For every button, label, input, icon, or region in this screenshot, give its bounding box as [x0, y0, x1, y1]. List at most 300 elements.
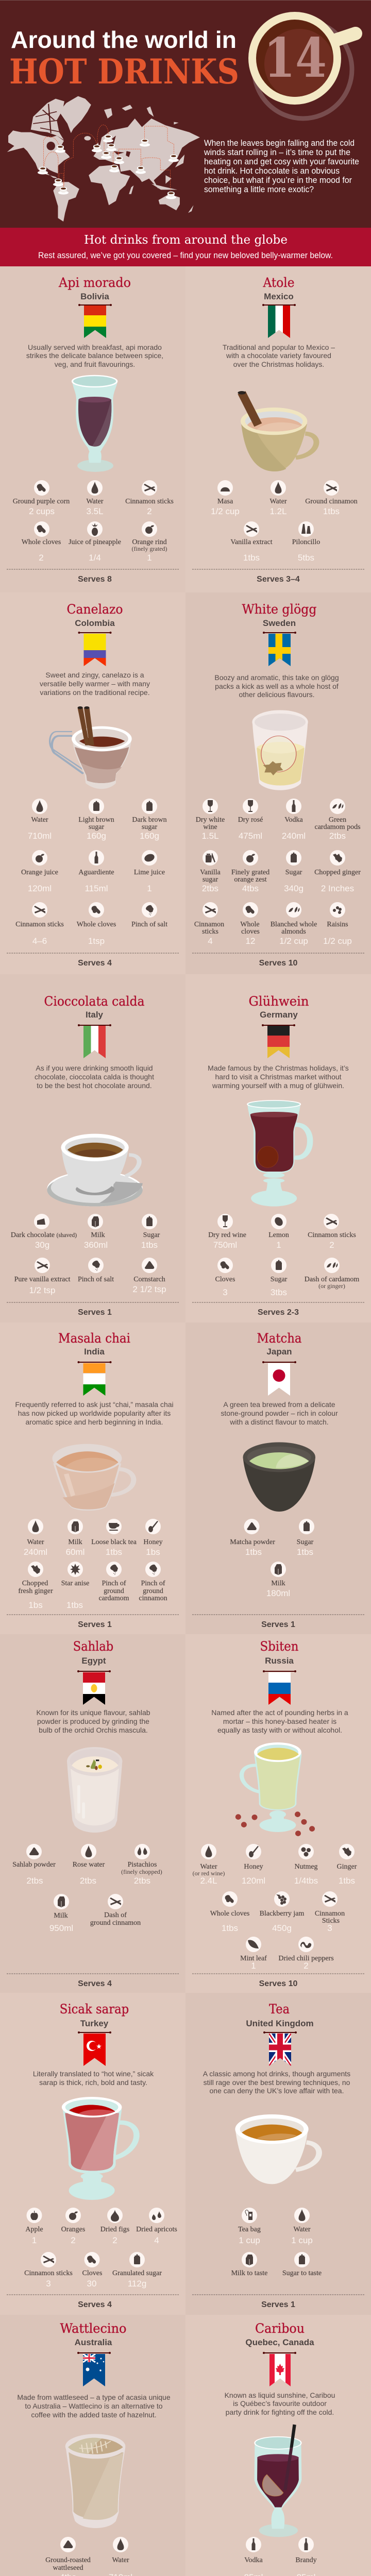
description: Known as liquid sunshine, Caribou: [225, 2391, 335, 2399]
ingredient: chopped fresh ginger: [18, 1562, 53, 1610]
serves: Serves 1: [78, 1620, 112, 1629]
ingredient: apple: 1: [32, 2235, 37, 2245]
ingredient: raisins: 1/2 cup: [323, 936, 352, 946]
ingredient: cinnamon sticks: [194, 902, 224, 946]
ingredient: star anise: 1tbs: [66, 1600, 83, 1610]
ingredient: sugar: 340g: [284, 884, 303, 893]
ingredient: tea bag: [238, 2208, 261, 2245]
ingredient: vanilla extract: Vanilla extract: [230, 538, 273, 546]
description: Made famous by the Christmas holidays, it’s: [208, 1064, 349, 1072]
ingredient: whole cloves: Whole: [240, 921, 260, 928]
country: Russia: [265, 1656, 294, 1666]
ingredient: dark chocolate: 30g: [35, 1240, 49, 1250]
ingredient: vanilla sugar: 2tbs: [202, 884, 218, 893]
ingredient: blanched whole almonds: almonds: [281, 928, 306, 936]
ingredient: whole cloves: [210, 1891, 249, 1933]
ingredient: cornstarch: 2 1/2 tsp: [132, 1284, 166, 1294]
description: A classic among hot drinks, though arguments: [203, 2070, 350, 2078]
description: party drink for fighting off the cold.: [226, 2408, 334, 2416]
icon: coffee cup with number 14: [248, 12, 356, 118]
description: over the Christmas holidays.: [233, 360, 324, 368]
ingredient: pistachios: [121, 1844, 162, 1886]
ingredient: cinnamon sticks: [125, 480, 174, 516]
ingredient: milk: 60ml: [66, 1547, 85, 1557]
ingredient: green cardamom pods: [314, 799, 361, 841]
ingredient: brandy: [295, 2537, 317, 2576]
ingredient: blackberry jam: Blackberry jam: [260, 1910, 304, 1918]
ingredient: ground cinnamon: cinnamon: [139, 1595, 167, 1602]
country: India: [84, 1347, 105, 1357]
country: Colombia: [75, 618, 115, 628]
heading: Wattlecino: [60, 2321, 127, 2336]
ingredient: dried apricots: [136, 2208, 177, 2245]
ingredient: blanched whole almonds: [271, 902, 317, 946]
ingredient: water: Water: [293, 2226, 311, 2233]
illustration: matcha bowl: [243, 1442, 315, 1512]
ingredient: pistachios: Pistachios: [128, 1861, 157, 1869]
flag: Egypt: [77, 1670, 111, 1705]
ingredient: mint leaf: 1: [251, 1961, 256, 1971]
ingredient: whole cloves: 2: [39, 553, 44, 563]
ingredient: pure vanilla extract: 1/2 tsp: [29, 1285, 56, 1295]
ingredient: dry red wine: Dry red wine: [208, 1231, 246, 1239]
heading: Matcha: [257, 1331, 302, 1346]
panel: Matcha: [185, 1323, 371, 1634]
ingredient: orange juice: 120ml: [28, 884, 52, 893]
ingredient: dash of cardamom: Dash of cardamom: [305, 1276, 359, 1283]
ingredient: ground cardamom: cardamom: [98, 1595, 129, 1602]
ingredient: orange rind: (finely grated): [132, 545, 167, 552]
illustration: api morado glass: [72, 376, 117, 472]
heading: Masala chai: [58, 1331, 130, 1346]
ingredient: blanched whole almonds: Blanched whole: [271, 921, 317, 928]
ingredient: lime juice: [134, 850, 165, 893]
ingredient: mint leaf: Mint leaf: [240, 1955, 267, 1962]
description: [203, 2070, 350, 2095]
ingredient: honey: [143, 1519, 163, 1557]
intro text: [204, 139, 359, 194]
ingredient: light brown sugar: sugar: [89, 823, 104, 831]
ingredient: whole cloves: [77, 902, 116, 946]
ingredient: juice of pineapple: Juice of pineapple: [69, 538, 121, 546]
ingredient: milk: 360ml: [84, 1240, 108, 1250]
ingredient: pinch of salt: Pinch of salt: [131, 921, 167, 928]
ingredient: ground-roasted wattleseed: wattleseed: [53, 2564, 83, 2572]
ingredient: chopped ginger: Chopped ginger: [314, 869, 361, 876]
ingredient: dry rosé: Dry rosé: [238, 816, 263, 824]
ingredient: cinnamon sticks: Cinnamon sticks: [24, 2269, 73, 2277]
section subheading: Rest assured, we’ve got you covered – find your new beloved belly-warmer below.: [38, 251, 333, 260]
illustration: sbiten glass with berries: [235, 1742, 315, 1836]
ingredient: star anise: Star anise: [61, 1580, 89, 1587]
ingredient: rose water: 2tbs: [80, 1876, 96, 1886]
ingredient: masa: Masa: [217, 498, 233, 505]
ingredient: vanilla sugar: Vanilla: [200, 869, 221, 876]
ingredient: cinnamon sticks: Cinnamon sticks: [15, 921, 64, 928]
ingredient: raisins: [323, 902, 352, 946]
ingredient: honey: Honey: [143, 1538, 163, 1546]
heading: Glühwein: [248, 994, 309, 1009]
ingredient: sahlab powder: 2tbs: [26, 1876, 43, 1886]
illustration: white glögg glass: [252, 710, 308, 790]
ingredient: matcha powder: Matcha powder: [230, 1538, 275, 1546]
ingredient: lime juice: Lime juice: [134, 869, 165, 876]
panel: Cioccolata calda: [0, 974, 185, 1323]
ingredient: cloves: Cloves: [215, 1276, 235, 1283]
ingredient: dry white wine: [196, 799, 225, 841]
ingredient: dried figs: Dried figs: [100, 2226, 129, 2233]
intro text: winds start rolling in – it’s time to put the: [204, 148, 350, 157]
ingredient: milk: Milk: [54, 1912, 68, 1920]
heading: Sicak sarap: [60, 2002, 129, 2016]
ingredient: orange zest: 4tbs: [242, 884, 259, 893]
serves: Serves 1: [261, 2300, 295, 2309]
ingredient: milk: [49, 1894, 73, 1933]
panel: Wattlecino: [0, 2315, 185, 2576]
ingredient: chopped fresh ginger: Chopped: [22, 1580, 48, 1587]
description: [40, 671, 150, 697]
panel: White glögg: [185, 592, 371, 974]
ingredient: milk: 180ml: [266, 1588, 290, 1598]
description: equally as tasty with or without alcohol.: [217, 1726, 342, 1734]
world map with drink locations: [7, 96, 200, 222]
ingredient: dried apricots: 4: [154, 2235, 159, 2245]
ingredient: sugar: 1tbs: [297, 1547, 313, 1557]
ingredient: dark brown sugar: sugar: [142, 823, 157, 831]
icon: coffee cup with number 14: 14: [264, 26, 327, 90]
ingredient: aguardiente: [78, 850, 114, 893]
ingredient: masa: 1/2 cup: [211, 506, 240, 516]
ingredient: ground-roasted wattleseed: [45, 2537, 91, 2576]
ingredient: green cardamom pods: cardamom pods: [314, 823, 361, 831]
description: sarap is thick, rich, bold and tasty.: [39, 2078, 147, 2087]
ingredient: matcha powder: [230, 1519, 275, 1557]
ingredient: sugar: [141, 1214, 160, 1250]
description: Known for its unique flavour, sahlab: [36, 1708, 150, 1717]
ingredient: orange rind: 1: [147, 553, 152, 563]
ingredient: cinnamon sticks: 3: [46, 2279, 51, 2289]
heading: Sbiten: [260, 1639, 299, 1654]
flag: Bolivia: [78, 304, 112, 338]
country: Mexico: [264, 292, 294, 301]
panel: Glühwein: [185, 974, 371, 1323]
ingredient: masa: [211, 480, 240, 516]
ingredient: rose water: Rose water: [73, 1861, 105, 1869]
description: to be the best hot chocolate around.: [37, 1081, 152, 1090]
description: hard to visit a Christmas market without: [215, 1073, 342, 1081]
ingredient: dry rosé: 475ml: [239, 831, 262, 841]
ingredient: ginger: Ginger: [337, 1863, 357, 1871]
ingredient: whole cloves: Whole cloves: [22, 538, 61, 546]
ingredient: juice of pineapple: [69, 521, 121, 563]
ingredient: chopped fresh ginger: fresh ginger: [18, 1587, 53, 1595]
flag: Germany: [262, 1024, 295, 1058]
ingredient: loose black tea: Loose black tea: [91, 1538, 137, 1546]
description: [33, 2070, 154, 2087]
ingredient: ground cinnamon: Pinch of: [141, 1580, 165, 1587]
description: [36, 1708, 150, 1734]
intro text: heating on and get cosy with your favourite: [204, 157, 359, 166]
heading: Cioccolata calda: [44, 994, 145, 1009]
ingredient: vodka: Vodka: [244, 2556, 263, 2564]
ingredient: honey: 1bs: [146, 1547, 160, 1557]
ingredient: cinnamon sticks: Cinnamon: [194, 921, 224, 928]
country: Bolivia: [80, 292, 109, 301]
ingredient: pinch of salt: [131, 902, 167, 928]
ingredient: water: Water: [31, 816, 48, 824]
ingredient: sugar: 1tbs: [141, 1240, 158, 1250]
ingredient: cornstarch: Cornstarch: [133, 1276, 165, 1283]
ingredient: milk: 950ml: [49, 1923, 73, 1933]
description: Usually served with breakfast, api morado: [28, 343, 162, 351]
ingredient: orange zest: Finely grated: [231, 869, 269, 876]
ingredient: ground-roasted wattleseed: Ground-roasted: [45, 2556, 91, 2564]
panel: Tea: [185, 1993, 371, 2315]
description: still rage over the best brewing techniques, no: [204, 2078, 350, 2087]
ingredient: cinnamon sticks: Cinnamon: [315, 1910, 345, 1918]
ingredient: milk: [266, 1562, 290, 1598]
ingredient: nutmeg: [294, 1844, 318, 1886]
ingredient: whole cloves: 1tsp: [88, 936, 105, 946]
ingredient: cinnamon sticks: Cinnamon sticks: [125, 498, 174, 505]
ingredient: whole cloves: 1tbs: [222, 1923, 238, 1933]
description: strikes the delicate balance between spice,: [26, 351, 163, 360]
ingredient: ginger: 1tbs: [339, 1876, 355, 1886]
country: Japan: [266, 1347, 292, 1357]
ingredient: blanched whole almonds: 1/2 cup: [279, 936, 308, 946]
ingredient: ground cinnamon: [305, 480, 358, 516]
description: with a distinct flavour to match.: [229, 1418, 329, 1426]
ingredient: water: 1.2L: [269, 506, 287, 516]
serves: Serves 4: [78, 959, 112, 968]
ingredient: lemon: Lemon: [268, 1231, 289, 1239]
ingredient: dash of ground cinnamon: Dash of: [104, 1911, 127, 1919]
serves: Serves 8: [78, 575, 112, 584]
ingredient: sugar: 3tbs: [271, 1287, 287, 1297]
ingredient: apple: [25, 2208, 43, 2245]
description: powder is produced by grinding the: [37, 1717, 149, 1725]
ingredient: granulated sugar: [112, 2252, 162, 2289]
ingredient: pistachios: 2tbs: [134, 1876, 150, 1886]
ingredient: water: [269, 480, 287, 516]
ingredient: rose water: [73, 1844, 105, 1886]
description: bulb of the orchid Orchis mascula.: [39, 1726, 148, 1734]
ingredient: water: [28, 799, 52, 841]
ingredient: mint leaf: [240, 1937, 267, 1971]
intro text: hot drink. Hot chocolate is an obvious: [204, 166, 340, 176]
heading: Atole: [263, 275, 295, 290]
ingredient: orange zest: orange zest: [234, 876, 267, 884]
ingredient: piloncillo: 5tbs: [298, 553, 314, 563]
serves: Serves 4: [78, 1979, 112, 1988]
ingredient: water: Water: [27, 1538, 44, 1546]
ingredient: cinnamon sticks: [15, 902, 64, 946]
country: United Kingdom: [246, 2019, 314, 2028]
description: Boozy and aromatic, this take on glögg: [214, 673, 339, 682]
ingredient: raisins: Raisins: [327, 921, 348, 928]
ingredient: cinnamon sticks: [308, 1214, 356, 1250]
ingredient: cinnamon sticks: Sticks: [322, 1917, 340, 1925]
ingredient: vodka: [282, 799, 306, 841]
ingredient: water: 1 cup: [291, 2235, 313, 2245]
ingredient: water or red wine: (or red wine): [193, 1870, 225, 1877]
flag: Mexico: [262, 304, 296, 338]
header background: [0, 0, 371, 228]
ingredient: nutmeg: 1/4tbs: [294, 1876, 318, 1886]
panel: Masala chai: [0, 1323, 185, 1634]
ingredient: cloves: [82, 2252, 102, 2289]
description: [17, 2393, 171, 2419]
ingredient: orange zest: [231, 850, 269, 893]
ingredient: apple: Apple: [25, 2226, 43, 2233]
description: is Québec’s favourite outdoor: [233, 2399, 327, 2408]
description: [221, 1400, 338, 1426]
flag: Sweden: [263, 632, 296, 666]
ingredient: chopped ginger: 2 Inches: [321, 884, 354, 893]
description: Made from wattleseed – a type of acasia unique: [17, 2393, 171, 2401]
ingredient: whole cloves: cloves: [241, 928, 260, 936]
flag: United Kingdom: [263, 2031, 297, 2066]
ingredient: dry red wine: [208, 1214, 246, 1250]
ingredient: water or red wine: Water: [200, 1863, 217, 1871]
ingredient: cinnamon sticks: 4–6: [32, 936, 47, 946]
illustration: canelazo mug: [50, 706, 132, 789]
heading: Api morado: [58, 275, 131, 290]
ingredient: ground cardamom: ground: [104, 1587, 124, 1595]
ingredient: dry white wine: wine: [203, 823, 217, 831]
ingredient: dried apricots: Dried apricots: [136, 2226, 177, 2233]
ingredient: aguardiente: 115ml: [85, 884, 108, 893]
description: [26, 343, 163, 368]
ingredient: loose black tea: 1tbs: [106, 1547, 122, 1557]
ingredient: dry rosé: [238, 799, 263, 841]
ingredient: ground purple corn: Ground purple corn: [13, 498, 70, 505]
flag: Canada: [263, 2352, 296, 2386]
ingredient: milk: Milk: [91, 1231, 105, 1239]
serves: Serves 2-3: [258, 1308, 299, 1317]
ingredient: ground cardamom: [98, 1562, 129, 1602]
ingredient: dark chocolate: Dark chocolate (shaved): [11, 1231, 77, 1239]
panel: Canelazo: [0, 592, 185, 974]
ingredient: water: [109, 2537, 132, 2576]
description: [211, 1708, 348, 1734]
description: Traditional and popular to Mexico –: [223, 343, 335, 351]
ingredient: dark brown sugar: [132, 799, 167, 841]
ingredient: dash of cardamom: [305, 1258, 359, 1290]
ingredient: cinnamon sticks: [315, 1891, 345, 1933]
description: one can deny the UK’s love affair with tea.: [210, 2087, 344, 2095]
ingredient: water: 3.5L: [86, 506, 104, 516]
ingredient: honey: Honey: [244, 1863, 263, 1871]
ingredient: water: 710ml: [28, 831, 52, 841]
serves: Serves 4: [78, 2300, 112, 2309]
ingredient: oranges: Oranges: [61, 2226, 85, 2233]
description: aromatic spice and herb beginning in India.: [26, 1418, 163, 1426]
panel: Caribou: [185, 2315, 371, 2576]
ingredient: chopped ginger: [314, 850, 361, 893]
ingredient: piloncillo: Piloncillo: [292, 538, 320, 546]
description: mortar – this honey-based heater is: [223, 1717, 336, 1725]
description: other delicious flavours.: [239, 690, 315, 699]
ingredient: cinnamon sticks: Cinnamon sticks: [308, 1231, 356, 1239]
ingredient: water: [86, 480, 104, 516]
heading: Sahlab: [73, 1639, 113, 1654]
ingredient: water: [291, 2208, 313, 2245]
ingredient: dry white wine: 1.5L: [201, 831, 219, 841]
description: warming yourself with a mug of glühwein.: [212, 1081, 344, 1090]
ingredient: lime juice: 1: [147, 884, 152, 893]
ingredient: light brown sugar: [78, 799, 114, 841]
ingredient: dark brown sugar: Dark brown: [132, 816, 167, 824]
illustration: wattlecino glass: [65, 2434, 125, 2528]
panel: Sicak sarap: [0, 1993, 185, 2315]
ingredient: cinnamon sticks: sticks: [202, 928, 218, 936]
ingredient: orange juice: Orange juice: [21, 869, 58, 876]
ingredient: granulated sugar: Granulated sugar: [112, 2269, 162, 2277]
ingredient: orange rind: Orange rind: [132, 538, 167, 546]
ingredient: sahlab powder: [12, 1844, 56, 1886]
description: Sweet and zingy, canelazo is a: [45, 671, 144, 679]
description: with a chocolate variety favoured: [226, 351, 331, 360]
description: [208, 1064, 349, 1090]
description: coffee with the added taste of hazelnut.: [31, 2411, 157, 2419]
ingredient: milk: Milk: [271, 1580, 285, 1587]
ingredient: water: Water: [86, 498, 104, 505]
ingredient: sugar: [271, 1258, 288, 1297]
description: chocolate, cioccolata calda is thought: [35, 1073, 154, 1081]
ingredient: light brown sugar: Light brown: [78, 816, 114, 824]
ingredient: water: Water: [269, 498, 287, 505]
illustration: sicak sarap glass: [62, 2097, 137, 2200]
ingredient: milk: Milk: [68, 1538, 82, 1546]
illustration: tea cup: [235, 2114, 319, 2184]
ingredient: cloves: 3: [223, 1287, 228, 1297]
ingredient: whole cloves: [22, 521, 61, 563]
ingredient: sugar: Sugar: [143, 1231, 160, 1239]
ingredient: dried figs: [100, 2208, 129, 2245]
section heading: Hot drinks from around the globe: [84, 233, 288, 247]
illustration: sahlab glass: [67, 1747, 122, 1833]
ingredient: water: [24, 1519, 47, 1557]
ingredient: oranges: 2: [71, 2235, 76, 2245]
ingredient: dry white wine: Dry white: [196, 816, 225, 824]
ingredient: sugar: Sugar: [297, 1538, 314, 1546]
ingredient: dried chili peppers: 2: [303, 1961, 309, 1971]
ingredient: chopped fresh ginger: 1bs: [28, 1600, 43, 1610]
ingredient: vanilla sugar: [200, 850, 221, 893]
ingredient: water: 240ml: [24, 1547, 47, 1557]
description: stone-ground powder – rich in colour: [221, 1409, 338, 1417]
description: A green tea brewed from a delicate: [223, 1400, 335, 1409]
ingredient: star anise: [61, 1562, 89, 1610]
ingredient: orange juice: [21, 850, 58, 893]
ingredient: dry red wine: 750ml: [213, 1240, 237, 1250]
ingredient: milk: [66, 1519, 85, 1557]
serves: Serves 10: [259, 1979, 297, 1988]
serves: Serves 10: [259, 959, 297, 968]
ingredient: cinnamon sticks: 4: [208, 936, 213, 946]
ingredient: ground cardamom: Pinch of: [102, 1580, 126, 1587]
ingredient: ground cinnamon: 1tbs: [323, 506, 340, 516]
illustration: caribou glass: [255, 2425, 301, 2537]
illustration: cup and saucer: [47, 1134, 143, 1207]
ingredient: cinnamon sticks: 2: [329, 1240, 334, 1250]
ingredient: sugar to taste: [282, 2252, 322, 2277]
description: packs a kick as well as a whole host of: [215, 682, 339, 690]
heading: Canelazo: [67, 602, 123, 617]
intro text: When the leaves begin falling and the cold: [204, 139, 355, 148]
ingredient: blackberry jam: 450g: [272, 1923, 292, 1933]
